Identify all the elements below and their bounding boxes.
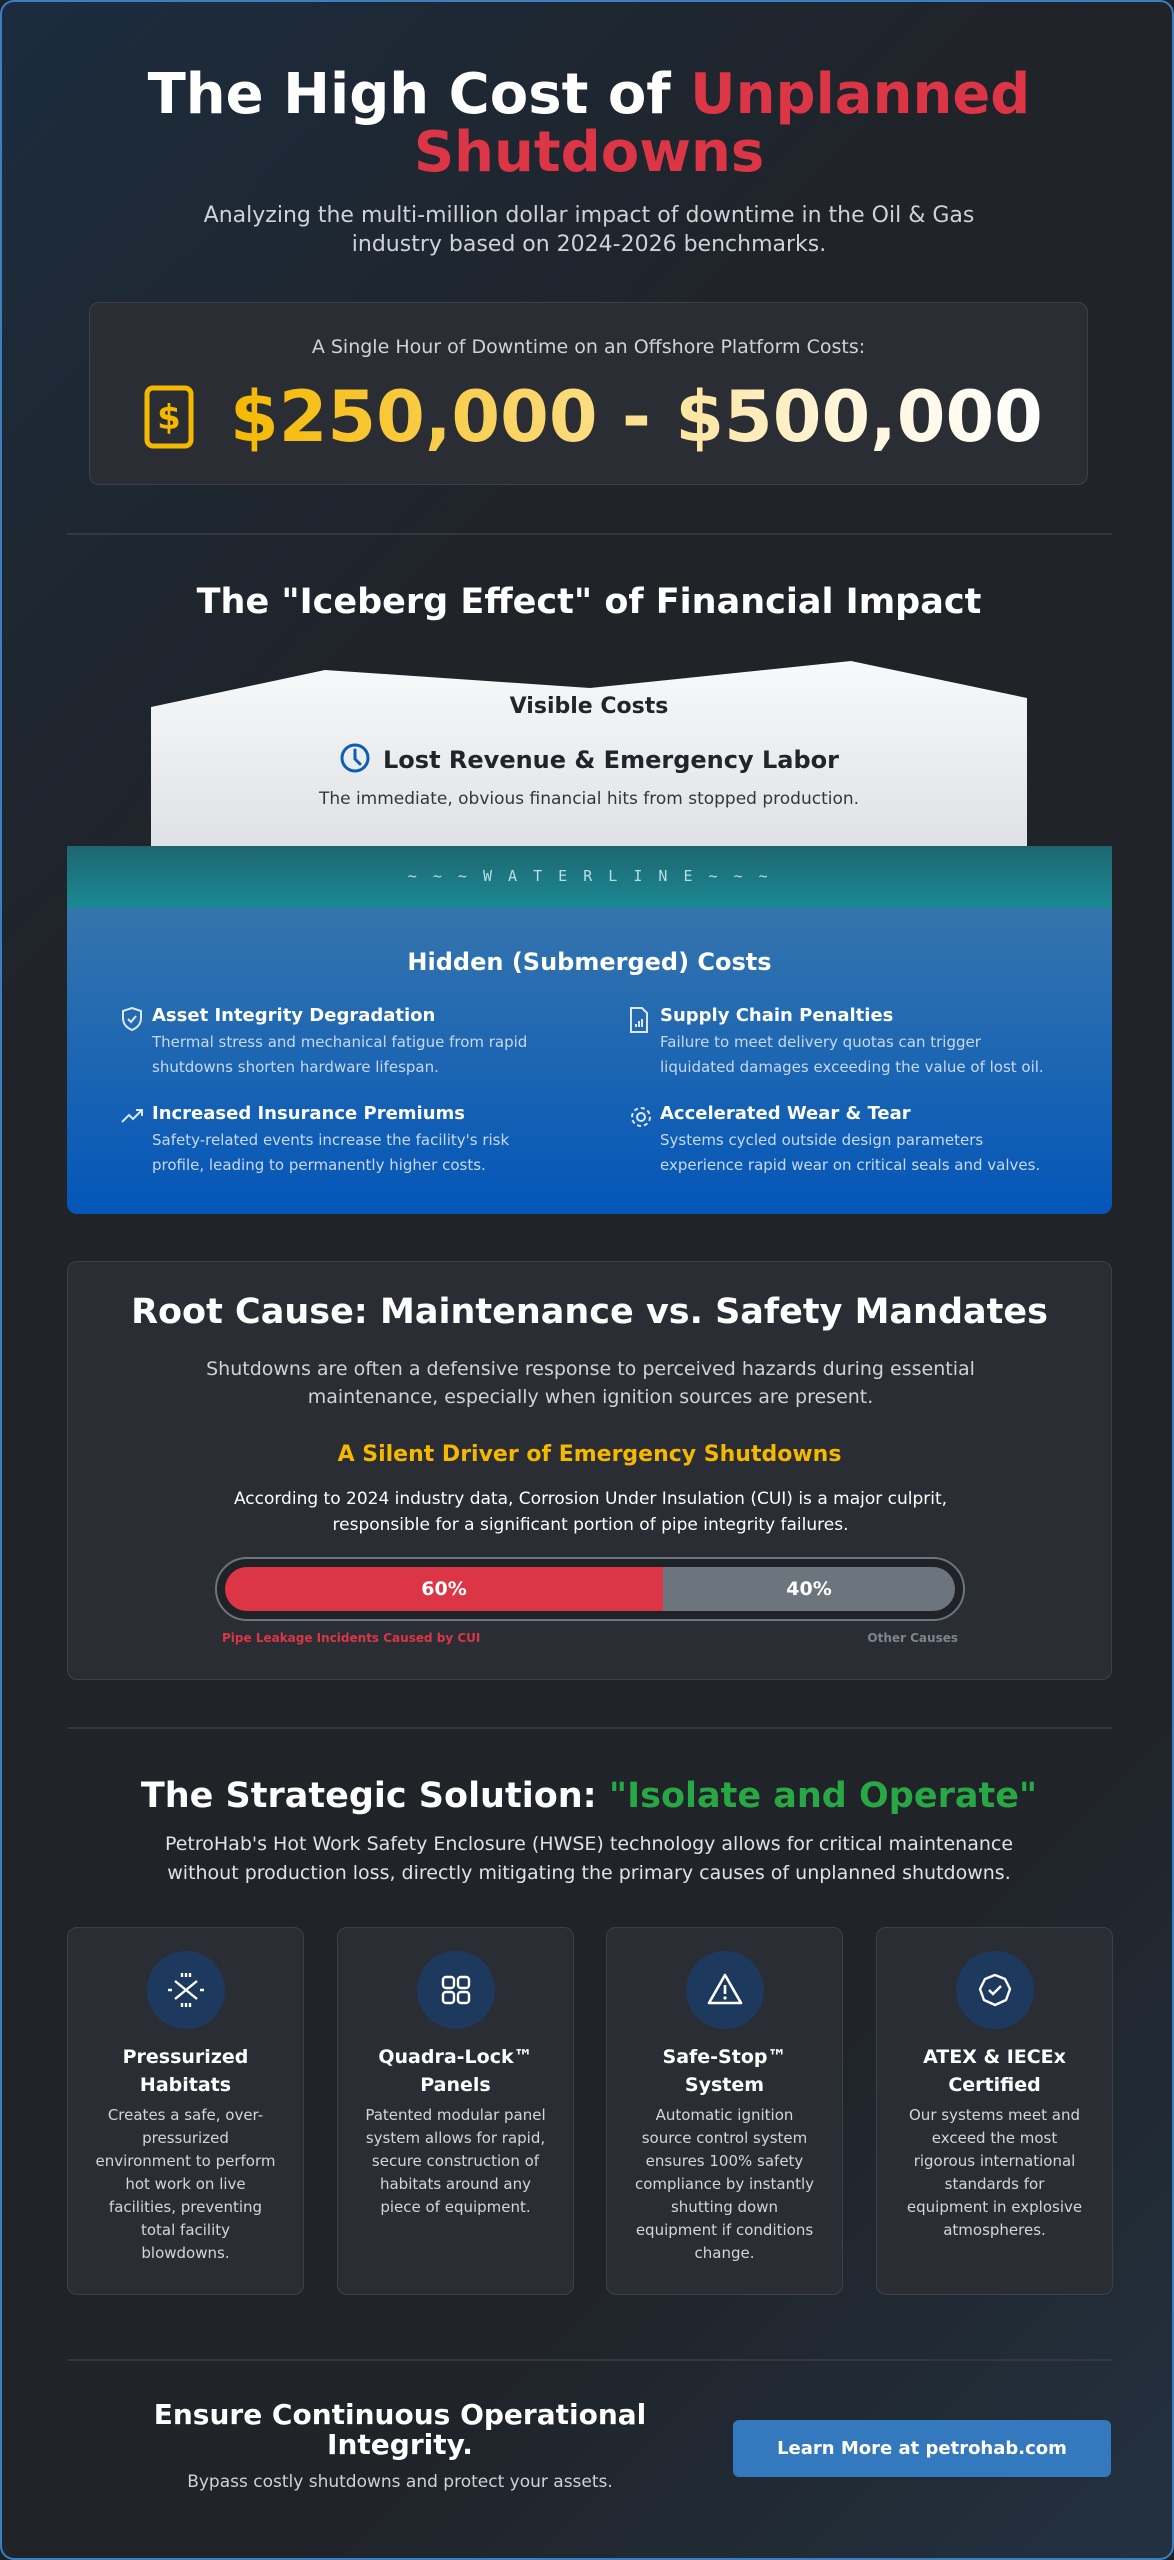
item: insurance [121, 1103, 509, 1174]
panel: cost per hour [89, 302, 1088, 485]
icon [147, 1951, 225, 2029]
card: quadra-lock: Patented modular panel system allows for rapid, secure construction of habitats around any piece of equipment. [365, 2106, 546, 2216]
panel: root cause [67, 1261, 1112, 1680]
solution description: PetroHab's Hot Work Safety Enclosure (HWSE) technology allows for critical maintenance without production loss, directly mitigating the primary causes of unplanned shutdowns. [165, 1833, 1013, 1884]
bar chart [215, 1557, 965, 1621]
item: wear: Systems cycled outside design parameters experience rapid wear on critical seals and valves. [660, 1131, 1040, 1174]
CTA heading: Ensure Continuous Operational Integrity. [154, 2398, 646, 2461]
card: safe-stop [606, 1927, 843, 2295]
item: wear [631, 1103, 1040, 1174]
card: safe-stop: Safe-Stop™ [663, 2046, 786, 2068]
card: quadra-lock: Quadra-Lock™ [378, 2046, 533, 2068]
icon [417, 1951, 495, 2029]
card: quadra-lock [337, 1927, 574, 2295]
button [733, 2420, 1111, 2477]
CUI description: According to 2024 industry data, Corrosion Under Insulation (CUI) is a major culprit, responsible for a significant portion of pipe integrity failures. [234, 1489, 947, 1535]
card: ATEX [876, 1927, 1113, 2295]
item: insurance: Safety-related events increase the facility's risk profile, leading to permanently higher costs. [152, 1131, 509, 1174]
card: pressurized habitats [67, 1927, 304, 2295]
item: asset integrity [122, 1005, 527, 1076]
card: pressurized habitats: blowdowns. [141, 2244, 230, 2262]
subtitle: Analyzing the multi-million dollar impact of downtime in the Oil & Gas industry based on 2024-2026 benchmarks. [204, 203, 974, 257]
icon: money [144, 386, 194, 448]
card: safe-stop: System [685, 2074, 764, 2096]
item: asset integrity: Thermal stress and mechanical fatigue from rapid shutdowns shorten hardware lifespan. [152, 1033, 527, 1076]
legend: CUI: Pipe Leakage Incidents Caused by CUI [222, 1631, 480, 1645]
subheading: silent driver: A Silent Driver of Emergency Shutdowns [338, 1442, 841, 1467]
bar: 60%: 60% [421, 1578, 467, 1600]
card: ATEX: Certified [948, 2074, 1041, 2096]
card: pressurized habitats: Pressurized [123, 2046, 248, 2068]
panel: hidden costs [67, 908, 1112, 1214]
root cause title: Root Cause: Maintenance vs. Safety Mandates [131, 1292, 1048, 1332]
card: ATEX: ATEX & IECEx [923, 2046, 1066, 2068]
card: pressurized habitats: Habitats [140, 2074, 231, 2096]
title: The High Cost of Unplanned [148, 62, 1030, 127]
card: quadra-lock: Panels [420, 2074, 491, 2096]
item: insurance: Increased Insurance Premiums [152, 1103, 465, 1124]
bar: 40% [663, 1567, 955, 1611]
item: supply chain: Failure to meet delivery quotas can trigger [660, 1033, 981, 1051]
item: asset integrity: Asset Integrity Degradation [152, 1005, 435, 1026]
icon [956, 1951, 1034, 2029]
waterline [67, 846, 1112, 908]
iceberg: visible costs [151, 661, 1027, 846]
item: wear: Accelerated Wear & Tear [660, 1103, 911, 1124]
lost revenue line with clock icon: Lost Revenue & Emergency Labor [383, 746, 839, 774]
item: supply chain: liquidated damages exceeding the value of lost oil. [660, 1058, 1044, 1076]
root cause description: Shutdowns are often a defensive response to perceived hazards during essential maintenance, especially when ignition sources are present. [206, 1358, 975, 1408]
heading: solution: The Strategic Solution: "Isolate and Operate" [141, 1776, 1037, 1816]
price range: $250,000 - $500,000 [230, 376, 1043, 458]
title [148, 62, 1030, 185]
bar: 60% [225, 1567, 663, 1611]
button: Learn More at petrohab.com [777, 2438, 1067, 2459]
card: pressurized habitats: Creates a safe, over-pressurized environment to perform hot work on live facilities, preventing total facility [95, 2106, 276, 2239]
icon: money: $ [157, 398, 181, 438]
title: Shutdowns [414, 120, 764, 185]
legend: other: Other Causes [867, 1631, 958, 1645]
waterline: ~ ~ ~ W A T E R L I N E ~ ~ ~ [408, 867, 771, 885]
item: supply chain [630, 1005, 1044, 1076]
hidden title: Hidden (Submerged) Costs [407, 948, 772, 976]
label: A Single Hour of Downtime on an Offshore Platform Costs: [312, 336, 865, 358]
card: safe-stop: Automatic ignition source control system ensures 100% safety compliance by instantly shutting down equipment if conditions change. [635, 2106, 814, 2262]
bar: 40%: 40% [786, 1578, 832, 1600]
item: supply chain: Supply Chain Penalties [660, 1005, 893, 1026]
visible costs title: Visible Costs [510, 694, 668, 719]
icon [686, 1951, 764, 2029]
CTA subtext: Bypass costly shutdowns and protect your assets. [187, 2472, 613, 2492]
heading: iceberg: The "Iceberg Effect" of Financial Impact [197, 582, 981, 622]
visible description: The immediate, obvious financial hits from stopped production. [319, 789, 859, 809]
card: ATEX: Our systems meet and exceed the most rigorous international standards for equipment in explosive atmospheres. [907, 2106, 1082, 2239]
